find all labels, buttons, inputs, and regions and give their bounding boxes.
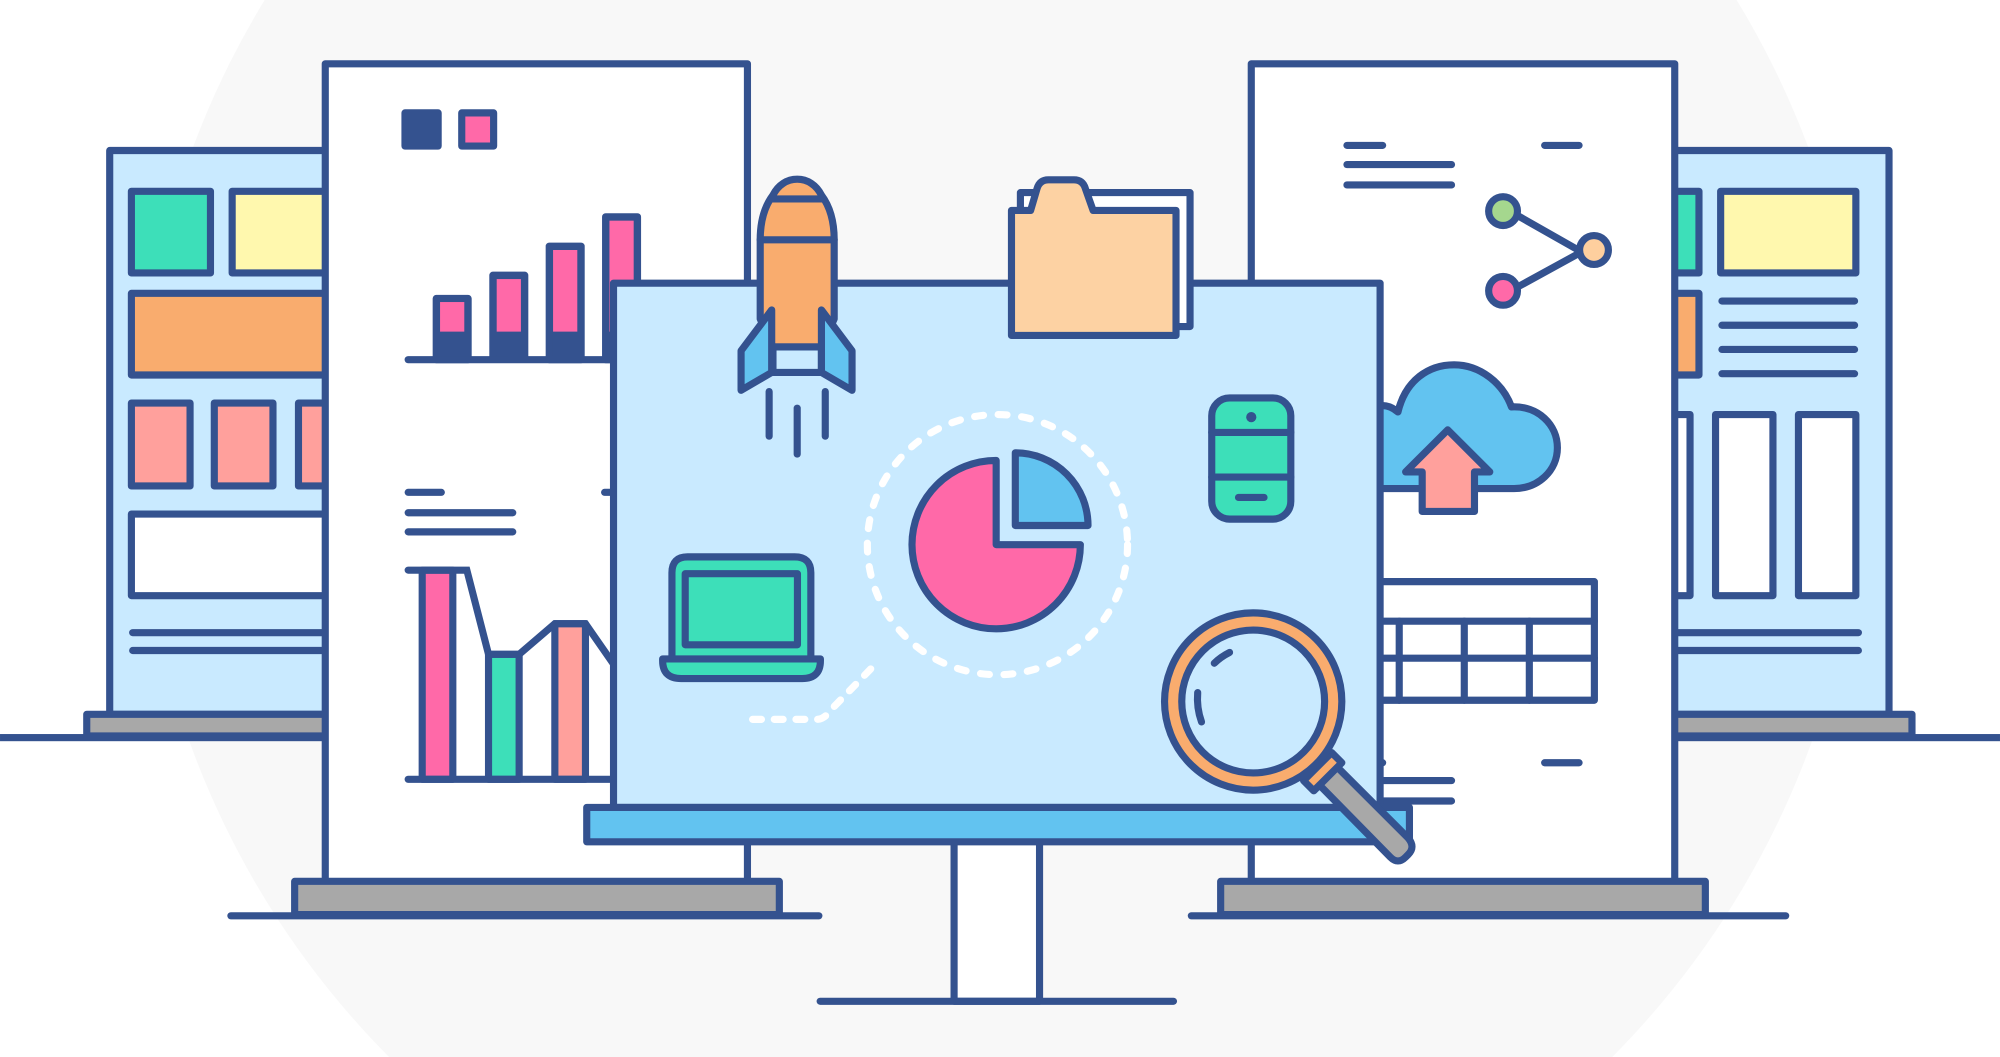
bar chart: rising bars <box>408 217 663 360</box>
icon: laptop <box>663 557 820 679</box>
dashed orbit path <box>753 415 1128 719</box>
monitor screen <box>614 283 1380 807</box>
panel: right document <box>1191 64 1786 916</box>
panel: left back page <box>87 151 365 736</box>
legend squares <box>405 113 494 146</box>
text lines <box>408 492 638 532</box>
icon: share nodes <box>1489 197 1608 305</box>
ground line <box>0 734 2000 741</box>
icon: magnifying glass <box>1165 613 1412 861</box>
data table <box>1352 582 1594 700</box>
icon: rocket <box>741 179 852 454</box>
icon: cloud upload <box>1352 365 1557 511</box>
panel: left document <box>231 64 819 916</box>
text lines <box>1347 145 1579 185</box>
pie chart <box>912 453 1088 629</box>
monitor bezel <box>587 807 1409 842</box>
panel: right back page <box>1634 151 1912 736</box>
text lines lower <box>1352 763 1579 801</box>
bar and line chart <box>408 570 638 779</box>
icon: smartphone <box>1212 398 1291 519</box>
icon: folder <box>1011 180 1190 335</box>
monitor stand <box>820 835 1173 1001</box>
